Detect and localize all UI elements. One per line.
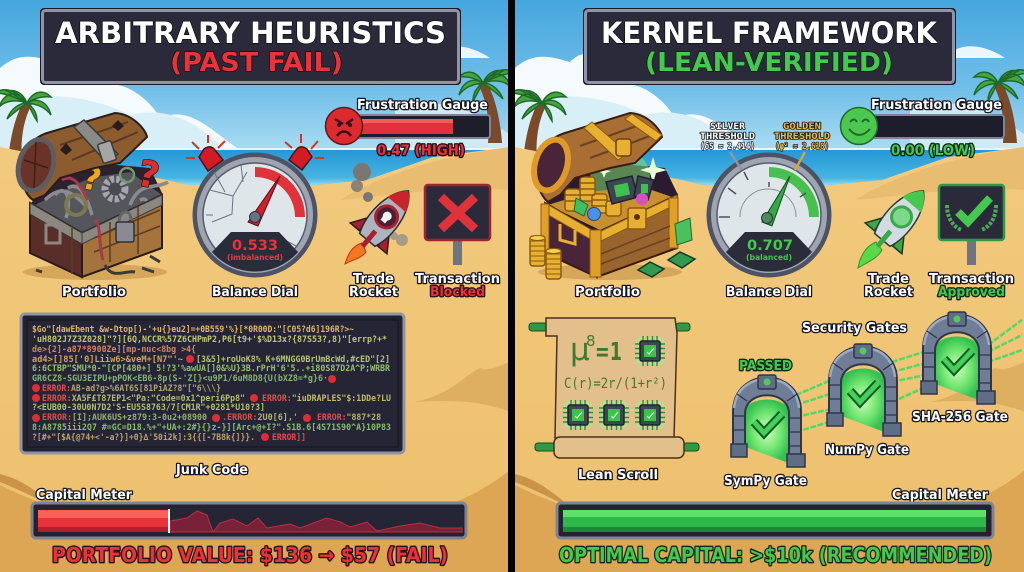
balance dial left: 0.533 imbalanced: 0.533 [232, 238, 278, 254]
label portfolio right: Portfolio [575, 285, 640, 300]
panel: junk code: de>{2]-a87*8900Ze][mp-nuc<8bg >4{ [32, 345, 196, 355]
title banner right: (LEAN-VERIFIED) [645, 48, 893, 78]
balance dial left: 0.533 imbalanced: (imbalanced) [227, 253, 283, 262]
balance dial left: 0.533 imbalanced [186, 134, 324, 278]
balance dial right: 0.707 balanced [700, 122, 832, 278]
panel: junk code: $Go"[dawEbent &w-Dtop[)-'+u{}eu2]=+0B559'%}[*0R00D:"[C05?d6]196R?>~ [32, 325, 355, 335]
label sympy gate: SymPy Gate [724, 474, 807, 489]
chips on scroll [563, 336, 665, 430]
gate: sympy [731, 375, 805, 467]
panel: junk code: ?[#+"[$A{@74+<'-a?}]+0}∆'50i2k]:3{{[-7B8k{]}}. [32, 432, 255, 443]
balance dial right: 0.707 balanced: (balanced) [746, 253, 792, 262]
lean scroll [529, 318, 699, 458]
capital meter left [32, 488, 466, 538]
frustration gauge right: 0.00 (LOW) [891, 143, 975, 159]
label trade rocket left: Trade [353, 272, 394, 287]
trade rocket right: healthy [858, 175, 942, 268]
panel: arbitrary heuristics (past fail) [0, 0, 520, 572]
title banner left: (PAST FAIL) [170, 48, 343, 78]
label portfolio left: Portfolio [62, 285, 126, 300]
portfolio chest: treasure [528, 113, 695, 280]
gate: sha-256 [921, 312, 995, 404]
title banner left [40, 8, 461, 85]
label sha-256 gate: SHA-256 Gate [912, 410, 1008, 425]
panel: junk code: ERROR]] [272, 433, 306, 443]
golden threshold marker: (φ² ≈ 2.618) [775, 142, 829, 152]
transaction approved sign: Approved [938, 285, 1005, 300]
panel: junk code: [3&5]+roUoK8% K+6MNGG0BrUmBcWd,#cED"[2] [196, 355, 390, 365]
junk contents: gears and question marks: ? [134, 153, 163, 197]
junk contents: gears and question marks [45, 153, 168, 222]
security gates [724, 312, 1022, 489]
lean scroll: μ [570, 332, 590, 368]
label passed: PASSED [739, 359, 792, 374]
transaction approved sign: Transaction [929, 272, 1014, 287]
lean scroll: 8 [586, 332, 596, 350]
panel: junk code: 'uH802J7Z3Z028]"?][6Q,NCCR%57Z6CHPmP2,P6[t9+'$%D13x?{87S53?,8)"[errp?+* [32, 335, 387, 345]
frustration gauge left [326, 98, 490, 159]
transaction blocked sign [415, 185, 500, 300]
treasure contents: coins, gems and chips [548, 148, 672, 230]
title banner left: ARBITRARY HEURISTICS [55, 16, 446, 50]
frustration gauge left: 0.47 (HIGH) [377, 143, 465, 159]
beach background left [0, 0, 520, 572]
transaction blocked sign: Transaction [415, 272, 500, 287]
label junk code: Junk Code [175, 463, 248, 478]
label security gates: Security Gates [802, 321, 907, 336]
golden threshold marker: THRESHOLD [774, 132, 830, 142]
panel: junk code: 6:6CTBP"SMU*0-"[CP[480+] 5!?3'%awUA[]0&%U}3B.rPrH'6'5..+i80S87D2A^P;WRBR [32, 363, 391, 374]
label trade rocket left [349, 272, 398, 300]
frustration gauge right [840, 98, 1004, 159]
panel: junk code: ERROR:AB-ad?g>%6AT6S[81PiAZ?8"["6\\\} [42, 383, 221, 394]
balance dial right: 0.707 balanced: 0.707 [747, 238, 793, 254]
silver threshold marker: SILVER [710, 122, 746, 132]
beach background right [510, 0, 1024, 572]
title banner right: KERNEL FRAMEWORK [601, 16, 938, 50]
label trade rocket right [864, 272, 913, 300]
data streams between gates [796, 320, 1022, 432]
panel: junk code: ERROR:XA5F£T87EP1<"Pa:"Code=0x1^peri6Pp8" [42, 393, 245, 404]
lean scroll: =1 [595, 337, 622, 366]
silver threshold marker: (δS ≈ 2.414) [700, 142, 755, 152]
golden threshold marker: GOLDEN [783, 122, 821, 132]
frustration gauge right: Frustration Gauge [871, 98, 1002, 113]
transaction blocked sign: Blocked [430, 285, 485, 300]
panel: junk code: ad4>[]85['0]Liiw6>&veM+[N7"'~ [32, 354, 184, 365]
label trade rocket left: Rocket [349, 285, 398, 300]
panel: junk code: ERROR:"iuDRAPLES"$:1DDe?LU [262, 393, 391, 404]
capital meter right: Capital Meter [892, 488, 989, 503]
silver threshold marker: THRESHOLD [700, 132, 755, 142]
gate: numpy [827, 344, 901, 436]
label numpy gate: NumPy Gate [825, 443, 909, 458]
panel: junk code: ERROR:"887*28 [317, 413, 381, 423]
label balance dial right: Balance Dial [726, 285, 812, 300]
portfolio chest: junk [12, 113, 168, 280]
frustration gauge left: Frustration Gauge [357, 98, 488, 113]
panel: junk code: 8:A8785iii2Q7 #=GC=D18.%+"+UA+:2#}{}z-}][Arc+@+I?".S1B.6[4S71S90^A}10P83 [32, 422, 391, 433]
golden threshold marker [774, 122, 830, 170]
label lean scroll: Lean Scroll [578, 468, 658, 483]
panel: junk code: .ERROR:2U0[6],' [222, 413, 298, 423]
panel: junk code [21, 314, 404, 453]
transaction approved sign [929, 185, 1014, 300]
title banner right [583, 8, 956, 85]
capital meter left: Capital Meter [36, 488, 133, 503]
panel: junk code: ?<EUB00-30U0N7D2'S-EU5S8763/7[CM1R"+0281*U10?3] [32, 403, 265, 413]
label balance dial left: Balance Dial [212, 285, 298, 300]
result left: portfolio value: PORTFOLIO VALUE: $136 → $57 (FAIL) [52, 543, 448, 567]
junk contents: gears and question marks: ? [79, 158, 105, 199]
lean scroll: C(r)=2r/(1+r²) [564, 376, 667, 392]
panel: kernel framework (lean-verified) [510, 0, 1024, 572]
label trade rocket right: Trade [868, 272, 909, 287]
trade rocket left: damaged [344, 163, 427, 264]
silver threshold marker [700, 122, 755, 170]
panel: junk code: ERROR:[I];AUK6US+z879:3-0u2+08900 [42, 413, 207, 423]
capital meter right [557, 488, 993, 538]
alarm sirens [186, 134, 324, 171]
panel: junk code: GR6CZ8-SGU3EIPU+pPOK<EB6-8p(S-'Z[}<u9P1/6uM8D8{U(bXZ8=*g}6· [32, 374, 328, 384]
label trade rocket right: Rocket [864, 285, 913, 300]
